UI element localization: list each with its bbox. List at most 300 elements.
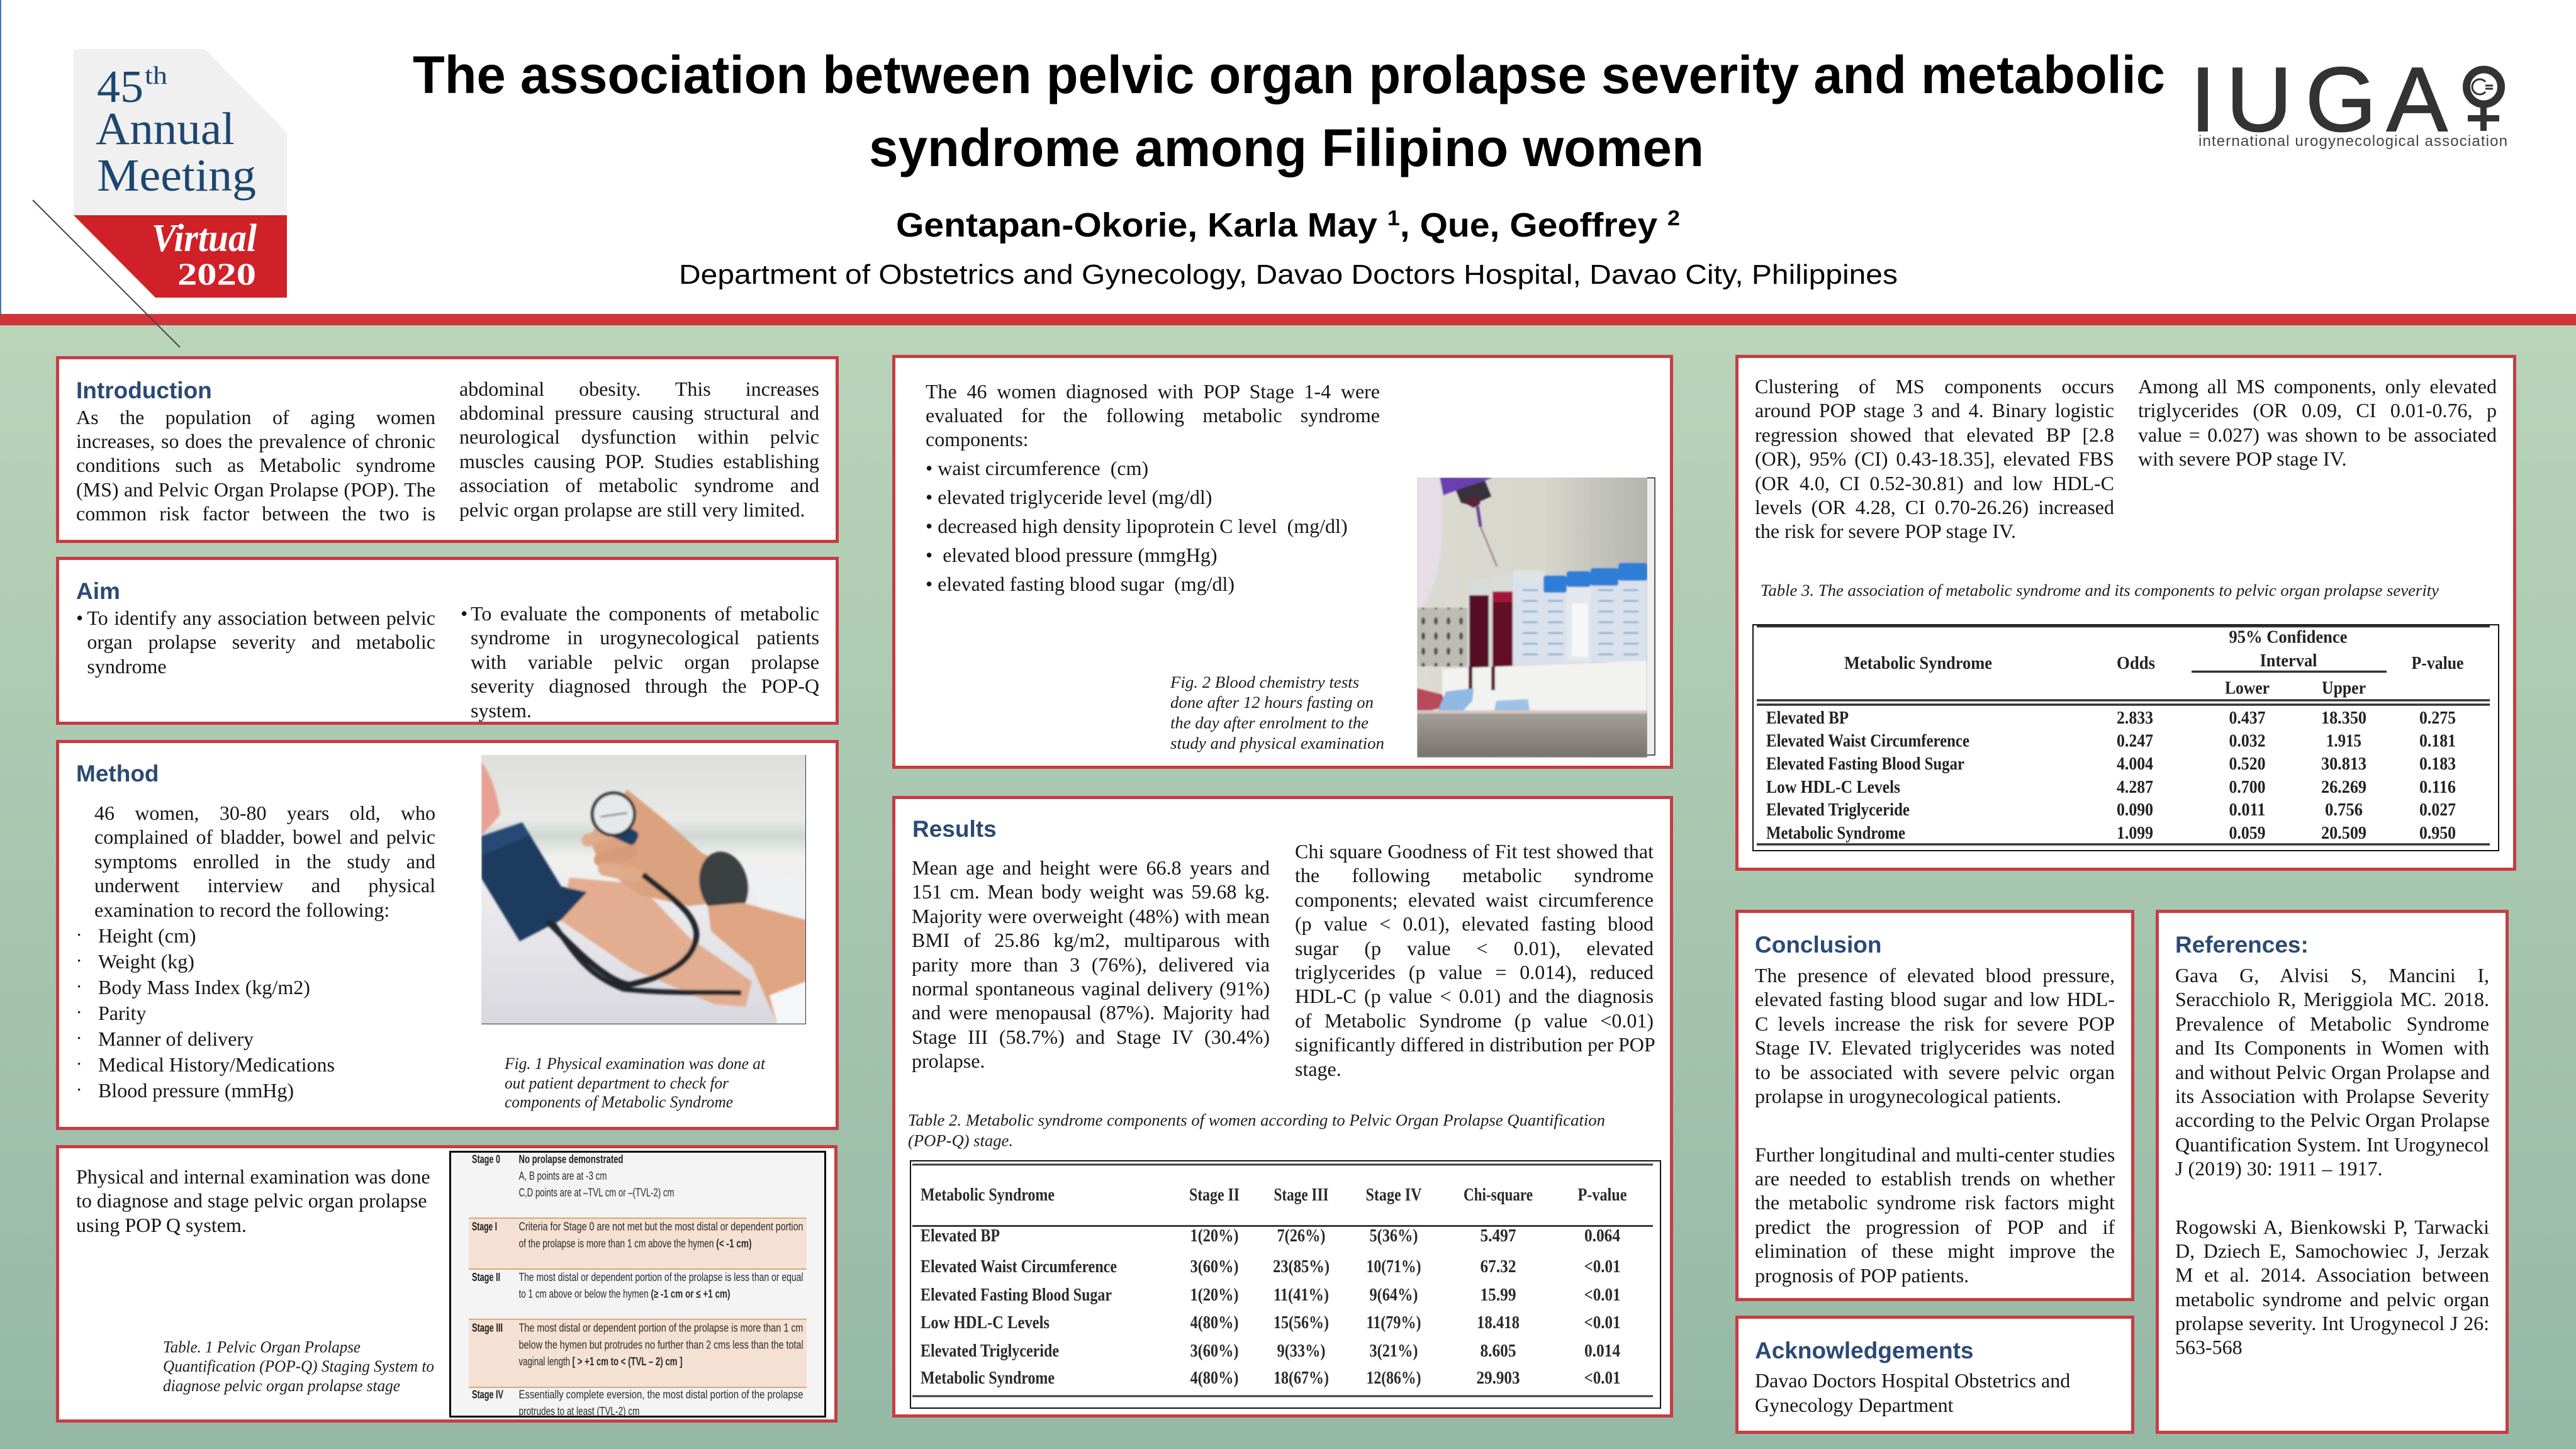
aim bullet 2: syndrome in urogynecological patients — [471, 626, 819, 649]
table 2 header row: Chi-square — [1464, 1185, 1533, 1205]
table 1: POP-Q staging system — [449, 1151, 827, 1418]
list: recorded parameters: Medical History/Medications — [98, 1053, 335, 1076]
stage II row: Stage II — [472, 1271, 500, 1284]
table 2 row: Metabolic Syndrome: 18(67%) — [1274, 1368, 1329, 1388]
text: reference 2 — [2175, 1214, 2489, 1360]
text: conclusion paragraph 2: are needed to establish trends on whether — [1755, 1167, 2115, 1190]
text: conclusion paragraph 1: prolapse in urogynecological patients. — [1755, 1085, 2061, 1107]
affiliation: Department of Obstetrics and Gynecology, Davao Doctors Hospital, Davao City, Philippines — [679, 259, 1898, 290]
text: conclusion paragraph 1: elevated fasting blood sugar and low HDL- — [1755, 988, 2115, 1010]
table 2 row: Elevated Triglyceride — [921, 1341, 1620, 1361]
text: conclusion paragraph 2: Further longitudinal and multi-center studies — [1755, 1143, 2115, 1166]
table 3 header: Lower — [2225, 678, 2270, 698]
stage II row — [472, 1271, 803, 1301]
heading: Acknowledgements: Acknowledgements — [1755, 1338, 1973, 1363]
text: regression column 2: Among all MS components, only elevated — [2138, 375, 2497, 398]
table 3 row: Elevated Triglyceride: Elevated Triglyceride — [1766, 800, 1910, 820]
table 3: odds ratios — [1752, 624, 2499, 851]
table 2 row: Elevated Waist Circumference: 10(71%) — [1367, 1256, 1421, 1277]
table 3 header: 95% Confidence — [2229, 628, 2347, 647]
table 3 row: Elevated Fasting Blood Sugar: 0.520 — [2229, 754, 2265, 774]
table 3 row: Low HDL-C Levels: Low HDL-C Levels — [1766, 778, 1900, 797]
text: reference 1: and without Pelvic Organ Prolapse and — [2175, 1061, 2490, 1083]
text: reference 2: M et al. 2014. Association between — [2175, 1263, 2489, 1286]
table 3 row: Elevated Waist Circumference: Elevated Waist Circumference — [1766, 731, 1969, 751]
table 3 row: Elevated BP: 0.275 — [2419, 708, 2456, 728]
table 2 row: Elevated Fasting Blood Sugar: 11(41%) — [1274, 1285, 1329, 1305]
aim bullet 2: with variable pelvic organ prolapse — [471, 651, 819, 673]
heading: Introduction: Introduction — [76, 378, 212, 403]
caption: table 1: diagnose pelvic organ prolapse stage — [163, 1377, 400, 1395]
text: method paragraph: underwent interview and physical — [94, 874, 435, 897]
authors: 2 — [1667, 206, 1680, 230]
table 3 row: Low HDL-C Levels: 4.287 — [2117, 778, 2153, 797]
list: metabolic syndrome components: • decreased high density lipoprotein C level (mg/dl) — [926, 515, 1348, 537]
table 3 row: Elevated BP — [1766, 708, 2456, 728]
text: regression column 1: regression showed that elevated BP [2.8 — [1755, 423, 2114, 446]
stage III row: The most distal or dependent portion of the prolapse is more than 1 cm — [518, 1322, 803, 1334]
IUGA logo: international urogynecological association — [2198, 133, 2507, 150]
table 3 row: Elevated Waist Circumference: 1.915 — [2326, 731, 2361, 751]
text: conclusion paragraph 1: to be associated with severe pelvic organ — [1755, 1061, 2115, 1083]
table 3 header: Upper — [2322, 678, 2366, 698]
text: regression column 1: Clustering of MS components occurs — [1755, 375, 2114, 398]
table 3 row: Elevated Waist Circumference: 0.181 — [2419, 731, 2456, 751]
table 3 row: Low HDL-C Levels — [1766, 778, 2456, 797]
text: reference 1 — [2175, 963, 2489, 1181]
aim bullet 2: To evaluate the components of metabolic — [471, 602, 819, 625]
table 2 row: Metabolic Syndrome: 4(80%) — [1190, 1368, 1238, 1388]
table 3 row: Elevated Fasting Blood Sugar: 4.004 — [2117, 754, 2153, 774]
text: results column 1: 151 cm. Mean body weight was 59.68 kg. — [912, 880, 1270, 903]
panel: results — [892, 796, 1673, 1418]
text: introduction column 1 — [76, 406, 435, 525]
table 3 row: Elevated BP: 0.437 — [2229, 708, 2265, 728]
stage 0 row: A, B points are at -3 cm — [518, 1170, 607, 1182]
text: introduction column 2: neurological dysfunction within pelvic — [459, 425, 819, 448]
stage II row: to 1 cm above or below the hymen (≥ -1 cm or ≤ +1 cm) — [518, 1288, 731, 1301]
text: reference 2: metabolic syndrome and pelvic organ — [2175, 1288, 2489, 1311]
tubes with blood — [1467, 574, 1513, 681]
IUGA logo: I — [2190, 48, 2215, 150]
text: conclusion paragraph 2: elimination of these might improve the — [1755, 1239, 2115, 1262]
text: acknowledgements — [1755, 1368, 2115, 1417]
text: physical examination: to diagnose and stage pelvic organ prolapse — [76, 1189, 427, 1212]
panel: regression findings — [1735, 355, 2516, 871]
table 2 row: Elevated BP: 1(20%) — [1190, 1226, 1238, 1246]
text: results column 1 — [912, 856, 1270, 1073]
text: method paragraph — [94, 801, 435, 922]
table 3 row: Low HDL-C Levels: 0.700 — [2229, 778, 2265, 797]
aim bullet 2: • — [461, 602, 468, 625]
conference logo: 45th Annual Meeting Virtual 2020: th — [145, 61, 167, 89]
text: reference 1: J (2019) 30: 1911 – 1917. — [2175, 1157, 2382, 1180]
table 2 row: Elevated Fasting Blood Sugar: Elevated Fasting Blood Sugar — [921, 1285, 1112, 1305]
text: results column 1: Mean age and height were 66.8 years and — [912, 856, 1270, 879]
text: physical examination: using POP Q system. — [76, 1214, 247, 1236]
table 2 row: Metabolic Syndrome — [921, 1368, 1621, 1388]
table 3 row: Elevated Fasting Blood Sugar: 0.183 — [2419, 754, 2456, 774]
table 2 row: Elevated Fasting Blood Sugar: <0.01 — [1584, 1285, 1621, 1305]
stage 0 row: C,D points are at –TVL cm or –(TVL-2) cm — [518, 1187, 675, 1199]
text: physical examination: Physical and internal examination was done — [76, 1165, 430, 1188]
table 3 row: Elevated Fasting Blood Sugar — [1766, 754, 2456, 774]
text: regression column 2: value = 0.027) was shown to be associated — [2138, 423, 2497, 446]
text: physical examination — [76, 1165, 454, 1237]
list: recorded parameters: Blood pressure (mmHg) — [98, 1079, 294, 1102]
table 3 row: Elevated Waist Circumference: 0.247 — [2117, 731, 2153, 751]
text: results column 1: and were menopausal (87%). Majority had — [912, 1001, 1270, 1024]
table 3 header: Interval — [2260, 651, 2317, 671]
table 3 header: Odds — [2117, 654, 2155, 673]
list: metabolic syndrome components — [926, 454, 1404, 598]
aim bullet 2: system. — [471, 699, 532, 722]
caption: table 1: Quantification (POP-Q) Staging System to — [163, 1357, 434, 1375]
text: conclusion paragraph 1: C levels increase the risk for severe POP — [1755, 1012, 2115, 1035]
table 3 row: Elevated BP: Elevated BP — [1766, 708, 1849, 728]
text: evaluation intro: The 46 women diagnosed with POP Stage 1-4 were — [926, 380, 1380, 403]
text: results column 2: sugar (p value < 0.01), elevated — [1295, 937, 1654, 959]
table 2: metabolic syndrome components by stage — [910, 1160, 1661, 1409]
table 2 header row: Stage IV — [1365, 1185, 1422, 1205]
aim bullet 1: To identify any association between pelvic — [87, 607, 435, 629]
table 3 row: Metabolic Syndrome: 1.099 — [2117, 824, 2153, 843]
panel: acknowledgements — [1735, 1316, 2134, 1434]
list: recorded parameters: Parity — [98, 1002, 146, 1024]
table 3 row: Metabolic Syndrome: 0.059 — [2229, 824, 2265, 843]
text: introduction column 2: pelvic organ prolapse are still very limited. — [459, 498, 805, 521]
text: regression column 1: the risk for severe POP stage IV. — [1755, 520, 2016, 542]
text: method paragraph: complained of bladder, bowel and pelvic — [94, 825, 435, 848]
photo: blood sample tubes — [1417, 478, 1656, 758]
aim bullet 2: severity diagnosed through the POP-Q — [471, 674, 819, 697]
table 2 row: Elevated Waist Circumference: Elevated Waist Circumference — [921, 1256, 1117, 1277]
table 2 header row: Metabolic Syndrome — [921, 1185, 1055, 1205]
table 2 row: Elevated Triglyceride: Elevated Triglyceride — [921, 1341, 1059, 1361]
caption: table 1: Table. 1 Pelvic Organ Prolapse — [163, 1338, 361, 1357]
table 2 row: Elevated Fasting Blood Sugar: 15.99 — [1480, 1285, 1516, 1305]
table 3 header — [1844, 628, 2464, 698]
IUGA logo: U — [2226, 48, 2292, 150]
text: introduction column 1: common risk factor between the two is — [76, 502, 435, 525]
table 2 row: Elevated Waist Circumference: <0.01 — [1584, 1256, 1621, 1277]
text: reference 1: according to the Pelvic Organ Prolapse — [2175, 1109, 2490, 1131]
text: results column 1: prolapse. — [912, 1049, 985, 1072]
table 3 row: Elevated BP: 2.833 — [2117, 708, 2153, 728]
heading: Results: Results — [912, 816, 997, 842]
text: evaluation intro: evaluated for the following metabolic syndrome — [926, 404, 1380, 427]
list: recorded parameters: Weight (kg) — [98, 950, 194, 973]
conference logo: 45th Annual Meeting Virtual 2020: Virtual — [152, 217, 257, 260]
panel: method — [56, 740, 839, 1130]
table 2 row: Low HDL-C Levels: <0.01 — [1584, 1312, 1621, 1333]
text: results column 2 — [1295, 839, 1654, 1081]
stage IV row: Stage IV — [472, 1389, 503, 1401]
list: recorded parameters: • — [77, 956, 81, 966]
stage I row — [472, 1221, 803, 1250]
list: recorded parameters: Manner of delivery — [98, 1027, 254, 1050]
text: regression column 1: (OR), 95% (CI) 0.43-18.35], elevated FBS — [1755, 447, 2114, 470]
table 2 row: Elevated BP: 0.064 — [1584, 1226, 1620, 1246]
stage 0 row: Stage 0 — [472, 1153, 500, 1165]
table 3 header: Metabolic Syndrome — [1844, 654, 1992, 673]
table 3 row: Elevated Triglyceride — [1766, 800, 2456, 820]
aim bullet 1: organ prolapse severity and metabolic — [87, 630, 435, 653]
text: regression column 1 — [1755, 374, 2114, 544]
text: results column 2: of Metabolic Syndrome (p value <0.01) — [1295, 1009, 1654, 1032]
text: reference 2: prolapse severity. Int Urogynecol J 26: — [2175, 1312, 2489, 1334]
text: regression column 2: triglycerides (OR 0.09, CI 0.01-0.76, p — [2138, 399, 2497, 422]
table 3 row: Elevated Triglyceride: 0.756 — [2325, 800, 2363, 820]
text: results column 2: components; elevated waist circumference — [1295, 888, 1654, 911]
caption: figure 1: components of Metabolic Syndrome — [505, 1093, 733, 1111]
stage III row: below the hymen but protrudes no further than 2 cms less than the total — [518, 1338, 803, 1351]
text: introduction column 1: conditions such as Metabolic syndrome — [76, 454, 435, 476]
conference logo: 45th Annual Meeting Virtual 2020: Annual — [96, 103, 235, 154]
diagonal line from logo — [0, 0, 201, 352]
panel: aim — [56, 557, 839, 725]
authors: 1 — [1387, 206, 1400, 230]
stage IV row: protrudes to at least (TVL-2) cm — [518, 1405, 639, 1418]
table 2 row: Low HDL-C Levels: 15(56%) — [1274, 1312, 1329, 1333]
list: recorded parameters: • — [77, 931, 81, 941]
caption: figure 2 — [1169, 667, 1396, 755]
title: syndrome among Filipino women — [869, 118, 1704, 177]
table 2 row: Elevated BP — [921, 1226, 1620, 1246]
text: evaluation intro — [926, 379, 1380, 452]
list: recorded parameters: • — [77, 982, 81, 992]
table 3 row: Elevated BP: 18.350 — [2321, 708, 2366, 728]
table 2 row: Elevated Waist Circumference: 23(85%) — [1273, 1256, 1330, 1277]
text: regression column 1: around POP stage 3 and 4. Binary logistic — [1755, 399, 2114, 422]
IUGA logo: A — [2387, 48, 2448, 150]
text: results column 2: the following metabolic syndrome — [1295, 864, 1654, 887]
stage III row: Stage III — [472, 1322, 503, 1334]
conference logo: 45th Annual Meeting Virtual 2020 — [74, 49, 287, 298]
heading: Method: Method — [76, 761, 159, 786]
stage III row — [472, 1322, 803, 1368]
caption: table 3: Table 3. The association of metabolic syndrome and its components to pelvic organ prolapse severity — [1761, 581, 2439, 600]
table 3 header: P-value — [2411, 654, 2464, 673]
table 3 row: Elevated Fasting Blood Sugar: 30.813 — [2321, 754, 2366, 774]
table 2 row: Metabolic Syndrome: 29.903 — [1476, 1368, 1520, 1388]
table 2 header row: Stage II — [1189, 1185, 1240, 1205]
table 3 row: Elevated Triglyceride: 0.090 — [2117, 800, 2153, 820]
background: green gradient — [0, 325, 2576, 1449]
caption: figure 1: Fig. 1 Physical examination was done at — [504, 1055, 766, 1073]
aim bullet 1: • — [76, 607, 83, 629]
text: reference 1: Seracchiolo R, Meriggiola MC. 2018. — [2175, 988, 2489, 1010]
text: conclusion paragraph 1 — [1755, 963, 2115, 1108]
text: conclusion paragraph 1: Stage IV. Elevated triglycerides was noted — [1755, 1036, 2115, 1059]
list: recorded parameters: • — [77, 1060, 81, 1070]
list: metabolic syndrome components: • elevated blood pressure (mmgHg) — [926, 544, 1218, 566]
table 2 row: Elevated BP: 7(26%) — [1277, 1226, 1325, 1246]
table 2 row: Elevated Triglyceride: 9(33%) — [1277, 1341, 1325, 1361]
header band — [0, 0, 2576, 325]
text: acknowledgements: Davao Doctors Hospital Obstetrics and — [1755, 1369, 2070, 1392]
table 2 row: Low HDL-C Levels: Low HDL-C Levels — [921, 1312, 1050, 1333]
caption: table 2: (POP-Q) stage. — [908, 1131, 1013, 1150]
text: reference 1: and Its Components in Women with — [2175, 1036, 2489, 1059]
table 2 row: Elevated Triglyceride: 0.014 — [1584, 1341, 1620, 1361]
IUGA logo: G — [2305, 48, 2377, 150]
text: introduction column 2: muscles causing POP. Studies establishing — [459, 450, 819, 473]
text: reference 1: Quantification System. Int Urogynecol — [2175, 1133, 2489, 1156]
text: conclusion paragraph 1: The presence of elevated blood pressure, — [1755, 964, 2115, 987]
text: results column 1: Majority were overweight (48%) with mean — [912, 905, 1270, 927]
table 2 row: Elevated Fasting Blood Sugar: 9(64%) — [1369, 1285, 1418, 1305]
text: conclusion paragraph 2 — [1755, 1143, 2115, 1287]
IUGA logo — [2190, 48, 2507, 150]
authors: , Que, Geoffrey — [1400, 206, 1667, 244]
table 2 row: Metabolic Syndrome: 12(86%) — [1367, 1368, 1421, 1388]
caption: figure 2: the day after enrolment to the — [1170, 714, 1369, 732]
caption: figure 2: done after 12 hours fasting on — [1170, 693, 1374, 712]
table 2 row: Low HDL-C Levels: 4(80%) — [1190, 1312, 1238, 1333]
stage I row: Criteria for Stage 0 are not met but the most distal or dependent portion — [518, 1221, 803, 1233]
table 2 row: Metabolic Syndrome: Metabolic Syndrome — [921, 1368, 1055, 1388]
table 3 row: Elevated Waist Circumference — [1766, 731, 2456, 751]
text: introduction column 1: increases, so does the prevalence of chronic — [76, 430, 435, 452]
heading: References: References: — [2175, 932, 2309, 958]
text: results column 2: stage. — [1295, 1058, 1341, 1080]
text: reference 1: its Association with Prolapse Severity — [2175, 1085, 2489, 1107]
text: results column 2: significantly differed in distribution per POP — [1295, 1033, 1655, 1056]
heading: Conclusion: Conclusion — [1755, 932, 1881, 958]
text: introduction column 1: (MS) and Pelvic Organ Prolapse (POP). The — [76, 478, 435, 501]
table 3 row: Metabolic Syndrome — [1766, 824, 2456, 843]
stage II row: The most distal or dependent portion of the prolapse is less than or equal — [518, 1271, 803, 1284]
title: The association between pelvic organ prolapse severity and metabolic — [413, 45, 2165, 104]
text: regression column 1: levels (OR 4.28, CI 0.70-26.26) increased — [1755, 496, 2114, 518]
table 3 row: Elevated Fasting Blood Sugar: Elevated Fasting Blood Sugar — [1766, 754, 1964, 774]
table 3 row: Low HDL-C Levels: 0.116 — [2419, 778, 2456, 797]
text: regression column 2: with severe POP stage IV. — [2138, 447, 2347, 470]
table 2 row: Elevated Fasting Blood Sugar — [921, 1285, 1621, 1305]
table 2 row: Elevated BP: Elevated BP — [921, 1226, 1000, 1246]
caption: table 1 — [162, 1334, 439, 1403]
stage 0 row — [472, 1153, 675, 1199]
panel: introduction — [56, 356, 839, 543]
text: method paragraph: symptoms enrolled in the study and — [94, 850, 435, 873]
table 3 row: Metabolic Syndrome: 0.950 — [2419, 824, 2456, 843]
panel: metabolic syndrome components — [892, 355, 1673, 769]
table 3 row: Low HDL-C Levels: 26.269 — [2321, 778, 2366, 797]
text: regression column 2 — [2138, 374, 2497, 471]
table 3 row: Metabolic Syndrome: 20.509 — [2321, 824, 2366, 843]
table 2 row: Elevated BP: 5(36%) — [1369, 1226, 1418, 1246]
text: reference 2: Rogowski A, Bienkowski P, Tarwacki — [2175, 1216, 2489, 1238]
caption: table 2 — [907, 1107, 1611, 1158]
aim bullet 1: syndrome — [87, 655, 167, 678]
table 3 row: Elevated Triglyceride: 0.027 — [2419, 800, 2456, 820]
conference logo: 45th Annual Meeting Virtual 2020: 2020 — [177, 256, 256, 291]
table 2 row: Elevated Triglyceride: 3(21%) — [1369, 1341, 1418, 1361]
text: results column 2: HDL-C (p value < 0.01) and the diagnosis — [1295, 985, 1654, 1007]
text: results column 1: parity more than 3 (76%), delivered via — [912, 953, 1270, 976]
table 2 row: Elevated Waist Circumference: 67.32 — [1480, 1256, 1516, 1277]
list: metabolic syndrome components: • elevated fasting blood sugar (mg/dl) — [926, 573, 1235, 595]
authors: Gentapan-Okorie, Karla May — [896, 206, 1351, 244]
table 2 header row — [921, 1185, 1627, 1205]
list: recorded parameters: Height (cm) — [98, 924, 196, 947]
table 2 row: Elevated Triglyceride: 8.605 — [1480, 1341, 1516, 1361]
stage IV row: Essentially complete eversion, the most distal portion of the prolapse — [518, 1389, 803, 1401]
stage III row: vaginal length [ > +1 cm to < (TVL – 2) cm ] — [518, 1355, 682, 1368]
list: recorded parameters: Body Mass Index (kg/m2) — [98, 976, 310, 999]
text: introduction column 2: abdominal obesity. This increases — [459, 378, 819, 400]
heading: Aim: Aim — [76, 578, 120, 604]
caption: figure 2: Fig. 2 Blood chemistry tests — [1170, 673, 1359, 691]
list: recorded parameters — [77, 923, 417, 1104]
text: reference 2: D, Dziech E, Samochowiec J, Jerzak — [2175, 1239, 2489, 1262]
list: recorded parameters: • — [77, 1085, 81, 1095]
text: results column 1: Stage III (58.7%) and Stage IV (30.4%) — [912, 1026, 1270, 1048]
text: results column 2: triglycerides (p value = 0.014), reduced — [1295, 961, 1654, 983]
text: conclusion paragraph 2: prognosis of POP patients. — [1755, 1264, 1969, 1287]
stage IV row — [472, 1389, 803, 1418]
text: results column 1: BMI of 25.86 kg/m2, multiparous with — [912, 929, 1270, 951]
table 2 row: Low HDL-C Levels: 18.418 — [1477, 1312, 1520, 1333]
aim bullet 1 — [76, 606, 435, 678]
caption: table 2: Table 2. Metabolic syndrome components of women according to Pelvic Organ Prolapse Quantification — [908, 1111, 1605, 1129]
caption: figure 1 — [503, 1051, 780, 1120]
text: conclusion paragraph 2: predict the progression of POP and if — [1755, 1216, 2115, 1238]
text: introduction column 1: As the population of aging women — [76, 406, 435, 428]
clear tubes with blue caps — [1513, 563, 1647, 664]
table 2 row: Elevated Waist Circumference: 3(60%) — [1190, 1256, 1238, 1277]
table 3 row: Elevated Triglyceride: 0.011 — [2229, 800, 2265, 820]
text: results column 1: normal spontaneous vaginal delivery (91%) — [912, 977, 1270, 1000]
list: metabolic syndrome components: • waist circumference (cm) — [926, 457, 1148, 479]
text: acknowledgements: Gynecology Department — [1755, 1394, 1953, 1416]
table 2 row: Elevated Fasting Blood Sugar: 1(20%) — [1190, 1285, 1238, 1305]
aim bullet 2 — [461, 601, 819, 722]
panel: conclusion — [1735, 910, 2134, 1301]
text: results column 2: Chi square Goodness of Fit test showed that — [1295, 840, 1654, 863]
text: evaluation intro: components: — [926, 428, 1029, 450]
conference logo: 45th Annual Meeting Virtual 2020: Meeting — [97, 150, 256, 201]
text: reference 2: 563-568 — [2175, 1336, 2243, 1358]
caption: figure 2: study and physical examination — [1170, 734, 1384, 752]
table 2 row: Metabolic Syndrome: <0.01 — [1584, 1368, 1621, 1388]
table 2 row: Elevated Waist Circumference — [921, 1256, 1621, 1277]
table 3 row: Metabolic Syndrome: Metabolic Syndrome — [1766, 824, 1905, 843]
table 2 row: Low HDL-C Levels: 11(79%) — [1367, 1312, 1421, 1333]
stage I row: of the prolapse is more than 1 cm above the hymen (< -1 cm) — [518, 1237, 751, 1250]
table 2 row: Elevated Triglyceride: 3(60%) — [1190, 1341, 1238, 1361]
photo: blood pressure measurement — [481, 755, 806, 1024]
list: metabolic syndrome components: • elevated triglyceride level (mg/dl) — [926, 486, 1212, 508]
caption: figure 1: out patient department to check for — [505, 1074, 729, 1092]
text: reference 1: Gava G, Alvisi S, Mancini I, — [2175, 964, 2489, 987]
stage I row: Stage I — [472, 1221, 497, 1233]
list: recorded parameters: • — [77, 1008, 81, 1018]
table 2 header row: P-value — [1578, 1185, 1627, 1205]
conference logo: 45th Annual Meeting Virtual 2020: 45 — [97, 61, 143, 112]
text: conclusion paragraph 2: the metabolic syndrome risk factors might — [1755, 1191, 2115, 1214]
text: introduction column 2: abdominal pressure causing structural and — [459, 401, 819, 424]
text: introduction column 2: association of metabolic syndrome and — [459, 474, 819, 496]
title — [413, 45, 2165, 177]
text: method paragraph: examination to record the following: — [94, 898, 389, 921]
panel: references — [2156, 910, 2509, 1434]
table 2 row: Elevated BP: 5.497 — [1480, 1226, 1516, 1246]
panel: physical examination and POP-Q table — [56, 1145, 837, 1423]
table 2 row: Low HDL-C Levels — [921, 1312, 1621, 1333]
list: recorded parameters: • — [77, 1034, 81, 1044]
